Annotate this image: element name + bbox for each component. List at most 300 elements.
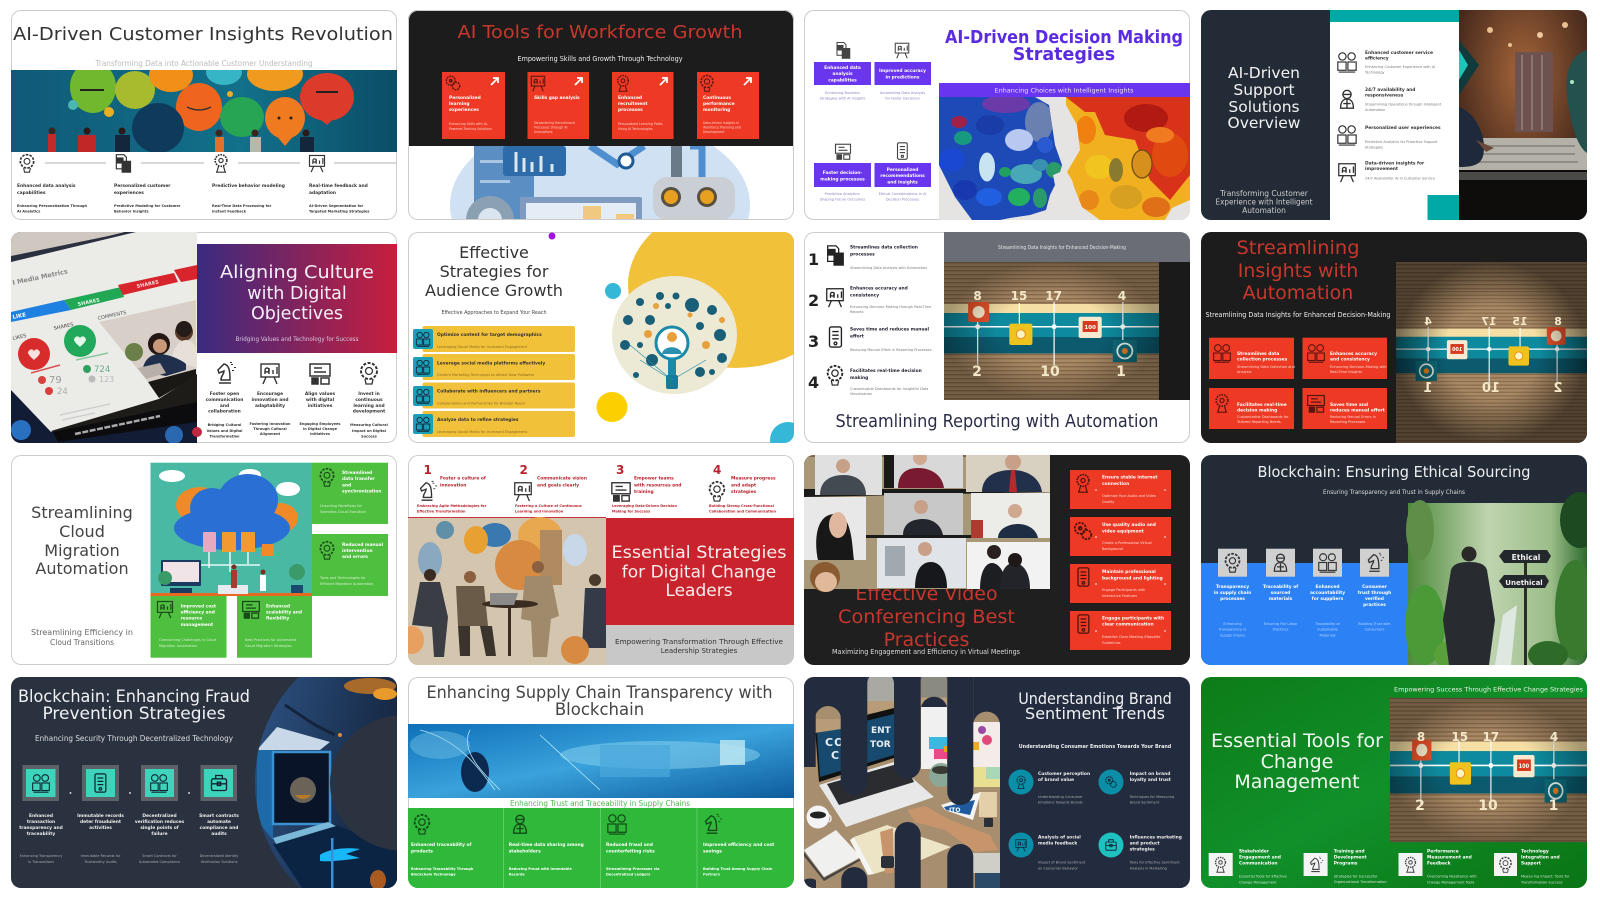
item: traceability: [1263, 549, 1298, 632]
item: brand loyalty: loyalty and trust: [1130, 777, 1171, 783]
item: transparency: transaction: [27, 819, 55, 825]
item: faster decision-making: Predictive Analytics:: [825, 192, 860, 196]
box: data transfer: Streamlined: [342, 470, 372, 476]
step 4: [808, 366, 928, 396]
item: innovation: Fostering Innovation: [249, 422, 291, 426]
title: Audience Growth: [425, 281, 563, 300]
title: Migration: [44, 541, 120, 560]
item: accountability: for suppliers: [1312, 596, 1344, 602]
item: accountability: Traceability of: [1314, 622, 1341, 626]
item: transparency: in supply chain: [1214, 590, 1251, 596]
card: continuous performance: monitoring: [703, 107, 730, 113]
item: performance measurement: Change Management Tools: [1427, 880, 1474, 884]
image: social media metrics tablet: SHARES: [53, 322, 74, 332]
card: enhanced recruitment: Using AI Technologies: [618, 127, 653, 131]
box: cost efficiency: Overcoming Challenges in Cloud: [159, 638, 216, 642]
step 4: making: [850, 375, 868, 381]
step 4: 4: [808, 373, 819, 392]
image: social media metrics tablet: LIKE: [12, 312, 27, 321]
item: consumer trust: Consumers: [1365, 628, 1385, 632]
image: social media metrics tablet: I Media Metrics: [12, 267, 69, 287]
mirrored timeline image: 2: [1553, 381, 1563, 396]
subtitle: Effective Approaches to Expand Your Reach: [442, 310, 546, 316]
item: brand perception: of brand value: [1038, 777, 1074, 783]
title: Sentiment Trends: [1025, 704, 1165, 723]
subtitle band: [939, 83, 1190, 97]
item descriptions: Targeted Marketing Strategies: [309, 210, 369, 214]
image: social media metrics tablet: 123: [99, 375, 114, 384]
timeline image: 8: [973, 289, 982, 303]
title: Strategies: [1013, 45, 1115, 65]
box: saves time: Reporting Processes: [1330, 420, 1366, 424]
item: align values: [300, 364, 340, 436]
item: smart contracts: Smart contracts: [199, 813, 239, 819]
item: social media feedback: media feedback: [1038, 840, 1077, 846]
title: Prevention Strategies: [42, 704, 226, 724]
item: customer service efficiency: Enhancing Customer Experience with AI: [1365, 65, 1435, 69]
column: efficiency and cost: Partners: [703, 872, 720, 876]
box: accuracy: and consistency: [1330, 356, 1370, 362]
image: social media metrics tablet: 79: [49, 375, 62, 386]
card: enhanced recruitment: [612, 72, 674, 139]
item: decentralized verification: Decentralized: [142, 813, 177, 819]
step 2: 2: [520, 463, 528, 477]
item: availability: 24/7 availability and: [1365, 87, 1415, 93]
header band: [944, 232, 1190, 262]
subtitle: Understanding Consumer Emotions Towards Your Brand: [1019, 744, 1172, 750]
item: availability: [1341, 87, 1442, 112]
image: cloud illustration: [150, 463, 312, 596]
item: transparency: in Transactions: [28, 860, 54, 864]
box: background and lighting: Engage Participants with: [1102, 588, 1145, 592]
item: marketing influence: and product: [1130, 840, 1160, 846]
panel: Understanding Brand Sentiment Trends: [804, 668, 1190, 888]
item: stakeholder engagement: Stakeholder: [1239, 848, 1270, 854]
card: personalized learning: [442, 72, 505, 139]
item: traceability: materials: [1269, 596, 1293, 602]
strategy row 1: [413, 326, 575, 352]
item: continuous learning: Invest in: [358, 391, 380, 397]
item: training and development: Programs: [1334, 860, 1358, 866]
timeline image: 2: [1415, 798, 1425, 814]
step 4: strategies: [731, 489, 757, 495]
title block: Essential Strategies: [612, 543, 787, 563]
item descriptions: Behavior Insights: [114, 210, 149, 214]
item descriptions: Predictive Modeling for Customer: [114, 204, 181, 208]
item: technology integration: Integration and: [1521, 854, 1560, 860]
box: reduced manual: Tools and Technologies for: [319, 576, 366, 580]
panel: Blockchain: Ensuring Ethical Sourcing: [1201, 455, 1600, 669]
box: accuracy: Enhances accuracy: [1330, 351, 1377, 357]
timeline image: 2: [972, 364, 982, 380]
item: stakeholder engagement: Communication: [1239, 860, 1277, 866]
panel: Essential Strategies for Digital Change Leaders: [400, 455, 794, 665]
item: align values: initiatives: [308, 403, 333, 409]
box: reduced manual: [312, 534, 388, 596]
item: customer service efficiency: Technology: [1364, 70, 1385, 74]
image: content creator desk with arch cutouts: TOR: [870, 740, 891, 750]
item: personalized recommendations: recommendations: [880, 173, 925, 179]
image: robot and businessman: [1459, 10, 1587, 220]
card: enhanced recruitment: processes: [618, 107, 643, 113]
item: accountability: Enhanced: [1315, 584, 1340, 590]
box: stable internet: Ensure stable internet: [1102, 474, 1157, 480]
sign: unethical: Unethical: [1505, 579, 1543, 587]
panel: AI-Driven Decision Making Strategies: [804, 10, 1190, 220]
panel: Essential Tools for Change Management: [1201, 677, 1587, 888]
card: personalized learning: Personalized: [449, 95, 481, 101]
item descriptions: Enhancing Personalization Through: [17, 204, 88, 208]
title: Blockchain: Ensuring Ethical Sourcing: [1258, 463, 1530, 481]
title block: Leaders: [665, 581, 733, 601]
timeline image: 10: [1040, 364, 1060, 380]
column: efficiency and cost: Improved efficiency and cost: [703, 842, 774, 848]
subtitle: Empowering Success Through Effective Change Strategies: [1394, 686, 1583, 694]
title block: [197, 244, 397, 353]
item: innovation: [249, 364, 291, 436]
timeline image: 17: [1045, 289, 1062, 303]
item: social media feedback: Impact of Brand Sentiment: [1038, 860, 1086, 864]
item: accountability: Sustainable: [1317, 628, 1338, 632]
item descriptions: [17, 204, 370, 213]
subtitle: Transforming Data into Actionable Customer Understanding: [95, 59, 313, 68]
title: Change: [1261, 751, 1333, 773]
timeline connector lines: [45, 162, 397, 164]
box: background and lighting: background and lighting: [1102, 576, 1163, 582]
card: continuous performance: Data-driven Insights in: [703, 121, 739, 125]
box: data collection: collection processes: [1237, 356, 1288, 362]
item: personalized recommendations: and insights: [887, 180, 918, 186]
column: traceability: Enhancing Traceability Through: [411, 867, 474, 871]
step 1: Effective Transformation: [417, 510, 466, 514]
title: Cloud: [59, 522, 105, 541]
item: continuous learning: development: [353, 408, 385, 414]
box: background and lighting: Maintain professional: [1102, 569, 1156, 575]
item: customer service efficiency: efficiency: [1365, 56, 1389, 62]
mirrored timeline image: 17: [1481, 315, 1497, 328]
title: Automation: [35, 559, 129, 578]
card: skills gap analysis: Streamlining Recruitment: [534, 121, 576, 125]
step 3: Leveraging Data-Driven Decision: [612, 504, 677, 508]
box: saves time: Reducing Manual Errors in: [1330, 415, 1376, 419]
item: accountability: [1310, 549, 1345, 638]
step 3: Making for Success: [612, 510, 650, 514]
item: enhanced data analysis: Enhancing Business: [825, 91, 860, 95]
step 1: [417, 463, 487, 514]
box: accuracy: [1302, 338, 1387, 379]
title: Insights with: [1238, 260, 1358, 282]
box: real-time: Tailored Reporting Needs: [1236, 420, 1281, 424]
item: open communication: Foster open: [210, 391, 239, 397]
decorative yellow blob: [628, 202, 842, 368]
box: data collection: Streamlining Data Collection and: [1237, 365, 1295, 369]
timeline image: 15: [1451, 730, 1468, 744]
step 1: Foster a culture of: [440, 476, 486, 482]
item: stakeholder engagement: [1209, 848, 1287, 884]
column: reduced fraud: Reduced fraud and: [606, 842, 653, 848]
title: Understanding Brand: [1018, 689, 1172, 708]
column: real-time sharing: Reducing Fraud with Immutable: [509, 867, 572, 871]
subtitle: Enhancing Security Through Decentralized Technology: [35, 734, 234, 743]
step 1: [808, 244, 927, 270]
step 4: Visualization: [850, 392, 872, 396]
step 1: Embracing Agile Methodologies for: [417, 504, 487, 508]
panel: Effective Video Conferencing Best Practices: [804, 451, 1190, 665]
strategy row 4: [413, 411, 575, 437]
step 3: with resources and: [634, 482, 681, 488]
box: cost efficiency: efficiency and: [181, 610, 215, 616]
subtitle block: [606, 625, 794, 665]
timeline image: 1: [1116, 364, 1126, 380]
box: clear communication: clear communication: [1102, 622, 1154, 628]
item: continuous learning: continuous: [355, 397, 383, 403]
box: scalability: flexibility: [266, 616, 289, 622]
item: stakeholder engagement: Change Management: [1239, 880, 1277, 884]
item: improved accuracy: in predictions: [885, 74, 920, 80]
item: personalized recommendations: Personalized: [887, 167, 918, 173]
subtitle block: Empowering Transformation Through Effective: [615, 638, 783, 646]
title block: Aligning Culture: [220, 263, 374, 283]
box: scalability: scalability and: [266, 610, 302, 616]
card: personalized learning: experiences: [449, 107, 479, 113]
strategy row 4: Leveraging Social Media for Increased Engagement: [437, 430, 528, 434]
title block: Bridging Values and Technology for Success: [236, 335, 359, 343]
box: real-time: [1209, 388, 1294, 429]
step 3: [808, 326, 932, 352]
box: clear communication: Engage participants with: [1102, 616, 1164, 622]
item: marketing influence: Analysis in Marketing: [1130, 866, 1167, 870]
item descriptions: AI Analytics: [17, 210, 40, 214]
subtitle: Streamlining Data Insights for Enhanced Decision-Making: [1206, 311, 1390, 319]
item: training and development: Strategies for Successful: [1334, 874, 1377, 878]
item descriptions: Real-Time Data Processing for: [212, 204, 272, 208]
item: traceability: sourced: [1271, 590, 1290, 596]
card: continuous performance: performance: [703, 101, 735, 107]
title: Overview: [1228, 114, 1301, 132]
step 3: 3: [808, 332, 819, 351]
box: data transfer: Unscaling Workflows for: [320, 504, 363, 508]
timeline image: [1390, 698, 1587, 842]
item: traceability: Traceability of: [1263, 584, 1298, 590]
item: innovation: innovation and: [251, 397, 289, 403]
box: real-time: decision making: [1237, 408, 1277, 414]
item: data-driven insights: improvement: [1365, 166, 1398, 172]
item: improved accuracy: Automating Data Analysis: [880, 91, 925, 95]
title: Automation: [1243, 282, 1353, 304]
box: data transfer: Seamless Cloud Transition: [320, 510, 366, 514]
title: Enhancing Supply Chain Transparency with: [426, 683, 772, 702]
title: Strategies for: [440, 262, 549, 281]
item: innovation: Alignment: [260, 432, 280, 436]
item: smart contracts: automate: [207, 819, 231, 825]
title: Blockchain: [555, 700, 644, 719]
item: brand loyalty: Techniques for Measuring: [1129, 795, 1174, 799]
item: transparency: Enhanced: [29, 813, 53, 819]
item: training and development: Organizational Transformation: [1334, 880, 1387, 884]
image: video call grid: [804, 451, 1050, 592]
item: decentralized verification: failure: [151, 831, 168, 837]
item: personalized user experiences: Predictive Analytics for Proactive Support: [1365, 140, 1438, 144]
subtitle: Ensuring Transparency and Trust in Supply Chains: [1323, 489, 1465, 496]
center white panel with teal accents: [1330, 10, 1459, 220]
item: technology integration: Support: [1521, 860, 1541, 866]
strategy row 2: Leverage social media platforms effectively: [437, 360, 545, 366]
box: clear communication: Guidelines: [1102, 641, 1121, 645]
title: AI-Driven Decision Making: [945, 28, 1183, 48]
item: decentralized verification: [135, 765, 184, 864]
column: traceability: Blockchain Technology: [411, 872, 456, 876]
step 2: and goals clearly: [537, 482, 579, 488]
step 3: Saves time and reduces manual: [850, 326, 929, 332]
step 1: innovation: [440, 482, 466, 488]
item: transparency: Transparency: [1216, 584, 1249, 590]
item: personalized recommendations: [874, 143, 931, 202]
item: transparency: Transparency in: [1218, 628, 1246, 632]
image: puzzle faces: [939, 95, 1190, 220]
item: immutable records: Trustworthy Audits: [83, 860, 117, 864]
timeline image: 10: [1478, 798, 1498, 814]
item headings: experiences: [114, 190, 144, 196]
panel: Streamlining Insights with Automation: [1201, 232, 1587, 443]
title: Conferencing Best: [838, 606, 1015, 628]
item: open communication: [206, 362, 243, 438]
item: immutable records: deter fraudulent: [80, 819, 121, 825]
image: blue data network: [408, 724, 794, 798]
subtitle: Experience with Intelligent: [1216, 198, 1313, 206]
item: availability: Streamlining Operations through Intelligent: [1365, 102, 1442, 106]
item: faster decision-making: making processes: [820, 176, 865, 182]
step 2: Learning and Innovation: [515, 510, 564, 514]
step 3: [612, 463, 681, 514]
timeline image: [944, 262, 1159, 400]
card: continuous performance: Continuous: [703, 95, 731, 101]
title block: Objectives: [251, 304, 343, 324]
subtitle: Cloud Transitions: [50, 638, 114, 647]
card: skills gap analysis: Skills gap analysis: [534, 95, 580, 101]
image: social media metrics tablet: 24: [57, 387, 68, 397]
strategy row 3: Collaborate with influencers and partners: [437, 388, 541, 394]
item: data-driven insights: [1339, 160, 1435, 182]
item: transparency: [19, 765, 63, 864]
item: smart contracts: Verification Solutions: [201, 860, 238, 864]
panel: Effective Strategies for Audience Growth: [408, 202, 842, 458]
title: Solutions: [1228, 98, 1300, 116]
column: efficiency and cost: Building Trust Among Supply Chain: [703, 867, 773, 871]
panel: Streamlining Cloud Migration Automation: [11, 455, 397, 665]
panel: AI-Driven Support Solutions Overview: [1201, 10, 1587, 220]
item: decentralized verification: Automated Compliance: [139, 860, 180, 864]
panel: AI-Driven Customer Insights Revolution: [11, 10, 397, 220]
step 3: 3: [616, 463, 624, 477]
item: personalized recommendations: Decision Processes: [886, 198, 919, 202]
card: continuous performance: Development: [703, 130, 725, 134]
card: personalized learning: Powered Training Solutions: [449, 127, 492, 131]
magenta accent dot: [548, 232, 556, 240]
item: align values: in Digital Change: [303, 427, 338, 431]
item: smart contracts: audits: [211, 831, 227, 837]
step 2: 2: [808, 291, 819, 310]
item: immutable records: [77, 765, 124, 864]
subtitle: Streamlining Efficiency in: [31, 628, 133, 637]
item: accountability: Materials: [1319, 634, 1336, 638]
item: open communication: and: [220, 403, 229, 409]
timeline image: 17: [1482, 730, 1499, 744]
item: smart contracts: [199, 765, 239, 864]
step 1: 1: [424, 463, 432, 477]
box: audio video equipment: [1070, 517, 1171, 556]
item: brand loyalty: Brand Sentiment: [1130, 800, 1160, 804]
item: faster decision-making: [814, 144, 871, 202]
item headings: capabilities: [17, 190, 46, 196]
item: open communication: communication: [206, 397, 243, 403]
card: continuous performance: Workforce Planning and: [703, 126, 741, 130]
item: enhanced data analysis: Enhanced data: [824, 65, 861, 71]
step 4: Building Strong Cross-Functional: [709, 504, 774, 508]
item: immutable records: Immutable Records for: [81, 854, 121, 858]
box: data transfer: and: [342, 482, 351, 488]
box: accuracy: Real-Time Insights: [1330, 370, 1362, 374]
step 4: [709, 463, 776, 514]
title block: with Digital: [247, 284, 347, 304]
item: technology integration: Technology: [1521, 848, 1549, 854]
panel: AI Tools for Workforce Growth: [408, 10, 794, 220]
step 4: Customizable Dashboards for Insightful Data: [850, 387, 928, 391]
box: reduced manual: Efficient Migration Automation: [320, 582, 373, 586]
card: enhanced recruitment: recruitment: [618, 101, 647, 107]
step 2: Enhances accuracy and: [850, 286, 908, 292]
step 2: Reports: [850, 310, 864, 314]
item: transparency: Enhancing: [1223, 622, 1242, 626]
item: brand perception: Emotions Towards Brands: [1038, 800, 1083, 804]
title: AI-Driven: [1228, 64, 1300, 82]
mirrored timeline image: 1: [1423, 381, 1433, 396]
column: efficiency and cost: savings: [703, 848, 722, 854]
timeline image: 4: [1550, 730, 1558, 744]
step 1: Streamlines data collection: [850, 244, 918, 250]
item: align values: Initiatives: [310, 432, 330, 436]
box: reduced manual: and errors: [342, 554, 368, 560]
title: Practices: [884, 629, 969, 651]
box: stable internet: Quality: [1102, 500, 1115, 504]
item: social media feedback: Analysis of social: [1038, 834, 1081, 840]
item: consumer trust: Building Trust with: [1358, 622, 1391, 626]
image: social media metrics tablet: 724: [94, 365, 110, 375]
item: smart contracts: Decentralized Identity: [200, 854, 238, 858]
item: improved accuracy: Improved accuracy: [879, 68, 926, 74]
item: marketing influence: strategies: [1130, 846, 1155, 852]
item headings: [17, 184, 368, 195]
box: real-time: Customizable Dashboards for: [1237, 415, 1289, 419]
title: Streamlining: [1236, 237, 1360, 259]
mirrored timeline image: 15: [1512, 315, 1528, 328]
item: immutable records: Immutable records: [77, 813, 124, 819]
step 2: Communicate vision: [537, 476, 587, 482]
image: content creator desk with arch cutouts: C: [831, 749, 839, 762]
subtitle block: Leadership Strategies: [661, 647, 738, 655]
step 2: consistency: [850, 292, 879, 298]
column: reduced fraud: [606, 815, 660, 876]
item: marketing influence: Influences marketing: [1130, 834, 1182, 840]
box: saves time: reduces manual effort: [1330, 408, 1385, 414]
box: scalability: [237, 596, 312, 658]
title: AI Tools for Workforce Growth: [458, 22, 742, 43]
step 3: Reducing Manual Effort in Reporting Processes: [850, 348, 932, 352]
item: continuous learning: learning and: [353, 403, 385, 409]
strategy row 3: [413, 382, 575, 408]
timeline image: 8: [1417, 730, 1425, 744]
step 2: Enhancing Decision-Making through Real-Time: [850, 305, 931, 309]
item: training and development: Training and: [1334, 848, 1365, 854]
